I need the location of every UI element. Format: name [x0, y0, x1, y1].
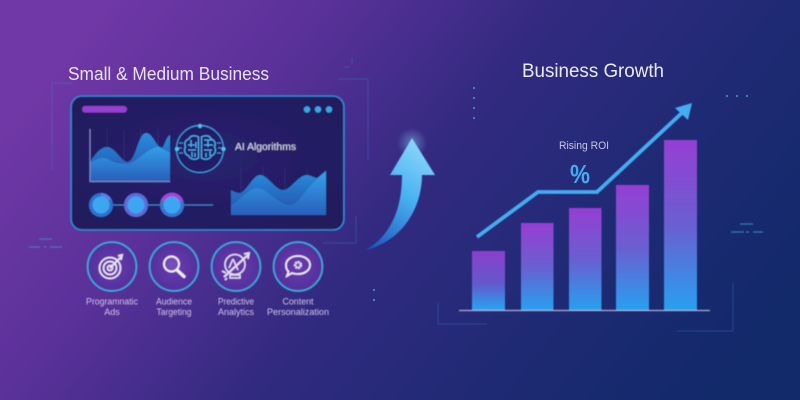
area chart: left [90, 129, 170, 182]
icon: AI brain [175, 124, 226, 172]
icon: target [100, 255, 122, 278]
icon: magnifier [164, 256, 184, 276]
feature: Programmatic Ads [86, 242, 138, 317]
icon: speech bubble with gear [286, 256, 310, 276]
feature: Programmatic Ads: Programnatic [86, 296, 138, 306]
pill: header bar [82, 106, 127, 112]
label: AI Algorithms: AI Algorithms [235, 141, 296, 153]
icon: crystal ball with arrow [222, 253, 249, 280]
feature: Predictive Analytics: Analytics [218, 307, 254, 317]
heading: Business Growth: Business Growth [522, 61, 664, 82]
area chart: right [231, 167, 326, 215]
label: Rising ROI: Rising ROI [559, 140, 609, 152]
arrow: growth trend line [477, 103, 692, 237]
feature: Content Personalization: Content [282, 296, 314, 306]
feature: Content Personalization [267, 242, 329, 317]
feature: Audience Targeting [150, 242, 198, 317]
feature: Audience Targeting: Audience [156, 296, 192, 306]
label: percent sign: % [570, 159, 590, 189]
feature: Predictive Analytics: Predictive [218, 296, 254, 306]
feature: Content Personalization: Personalization [267, 307, 329, 317]
feature: Programmatic Ads: Ads [104, 307, 120, 317]
panel: dashboard [71, 96, 344, 230]
feature: Predictive Analytics [212, 242, 260, 317]
bar chart: business growth [459, 140, 710, 310]
heading: Small & Medium Business: Small & Medium Business [68, 64, 269, 84]
feature: Audience Targeting: Targeting [156, 307, 192, 317]
progress nodes [89, 193, 213, 217]
window dots [304, 106, 332, 113]
arrow: curved upward transition [366, 128, 435, 250]
